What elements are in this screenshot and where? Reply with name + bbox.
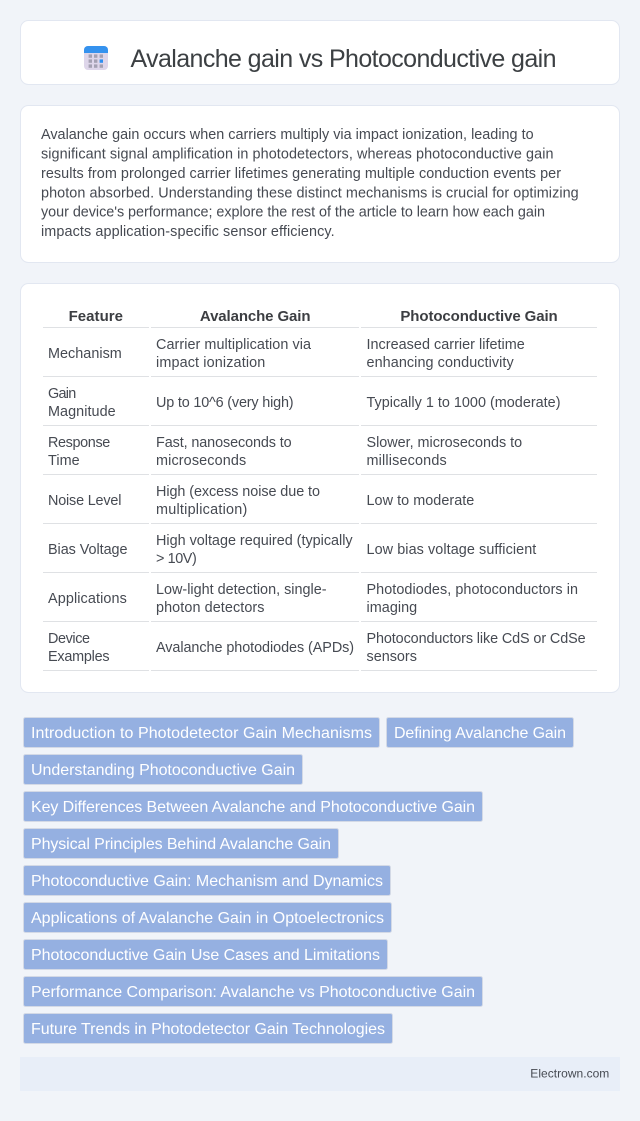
text block: introduction: photon absorbed. Understanding these distinct mechanisms is crucial for optimizing: [41, 185, 579, 201]
table row: device examples: [48, 631, 586, 665]
table row: response time: microseconds: [156, 453, 246, 469]
table row: response time: Fast, nanoseconds to: [156, 435, 292, 451]
tag: understanding photoconductive gain: [24, 754, 302, 784]
table row: device examples: Examples: [48, 649, 110, 665]
tag: performance comparison: Performance Comparison: Avalanche vs Photoconductive Gain: [31, 984, 475, 1001]
table row: applications: Low-light detection, single-: [156, 582, 327, 598]
table row: bias voltage: Low bias voltage sufficient: [366, 542, 536, 558]
tag: physical principles: [24, 828, 338, 858]
footer: Electrown.com: [530, 1066, 609, 1080]
table row: response time: Time: [48, 453, 80, 469]
table row: mechanism: Mechanism: [48, 346, 122, 362]
panel: intro paragraph: [20, 106, 620, 262]
table row: applications: imaging: [366, 600, 417, 616]
table row: applications: Photodiodes, photoconductors in: [366, 582, 578, 598]
table header row: Photoconductive Gain: [400, 308, 558, 325]
tag: use cases: Photoconductive Gain Use Cases and Limitations: [31, 947, 380, 964]
table header row: Avalanche Gain: [200, 308, 310, 325]
footer: [20, 1057, 620, 1091]
tag: mechanism and dynamics: Photoconductive Gain: Mechanism and Dynamics: [31, 873, 383, 890]
table row: response time: [48, 435, 522, 469]
table row: gain magnitude: Gain: [48, 386, 76, 402]
table row: noise level: [48, 484, 474, 518]
tag: defining avalanche gain: [386, 718, 574, 748]
tag: use cases: [24, 940, 388, 970]
table row: mechanism: enhancing conductivity: [366, 355, 514, 371]
table row: device examples: Avalanche photodiodes (APDs): [156, 640, 354, 656]
table header row: Feature: [69, 308, 123, 325]
tag: key differences: [24, 792, 482, 822]
icon: calendar grid: [84, 46, 108, 70]
tag list: article sections: [24, 718, 574, 1044]
table row: bias voltage: High voltage required (typically: [156, 533, 353, 549]
tag: defining avalanche gain: Defining Avalanche Gain: [394, 725, 566, 742]
panel: comparison table: [20, 284, 620, 692]
table row: mechanism: impact ionization: [156, 355, 265, 371]
tag: mechanism and dynamics: [24, 866, 390, 896]
table row: gain magnitude: [48, 386, 560, 420]
text block: introduction: significant signal amplification in photodetectors, whereas photoconductive gain: [41, 146, 554, 162]
table row: applications: photon detectors: [156, 600, 264, 616]
tag: physical principles: Physical Principles Behind Avalanche Gain: [31, 836, 331, 853]
table row: bias voltage: > 10V): [156, 551, 197, 567]
table row: mechanism: Carrier multiplication via: [156, 337, 311, 353]
table row: bias voltage: Bias Voltage: [48, 542, 128, 558]
table row: response time: Slower, microseconds to: [366, 435, 522, 451]
tag: applications: [24, 902, 392, 932]
text block: introduction: results from prolonged carrier lifetimes generating multiple conduction events per: [41, 166, 561, 182]
table row: gain magnitude: Magnitude: [48, 404, 116, 420]
table row: gain magnitude: Typically 1 to 1000 (moderate): [366, 395, 560, 411]
table row: device examples: sensors: [366, 649, 417, 665]
table header row: [69, 308, 558, 325]
table row: applications: Applications: [48, 591, 127, 607]
tag: key differences: Key Differences Between Avalanche and Photoconductive Gain: [31, 799, 475, 816]
table row: device examples: Device: [48, 631, 90, 647]
table row: applications: [48, 582, 578, 616]
tag: understanding photoconductive gain: Understanding Photoconductive Gain: [31, 762, 295, 779]
title: Avalanche gain vs Photoconductive gain: [130, 45, 556, 73]
table row: response time: Response: [48, 435, 110, 451]
tag: future trends: Future Trends in Photodetector Gain Technologies: [31, 1021, 385, 1038]
table row: gain magnitude: Up to 10^6 (very high): [156, 395, 294, 411]
tag: introduction: Introduction to Photodetector Gain Mechanisms: [31, 725, 372, 742]
table row: mechanism: Increased carrier lifetime: [366, 337, 525, 353]
tag: applications: Applications of Avalanche Gain in Optoelectronics: [31, 910, 384, 927]
table row: response time: milliseconds: [366, 453, 447, 469]
text block: introduction: Avalanche gain occurs when carriers multiply via impact ionization, leading to: [41, 127, 534, 143]
tag: introduction: [24, 718, 380, 748]
table row: noise level: multiplication): [156, 502, 247, 518]
tag: future trends: [24, 1014, 392, 1044]
table row: noise level: Noise Level: [48, 493, 121, 509]
table row: bias voltage: [48, 533, 536, 567]
table row: noise level: Low to moderate: [366, 493, 474, 509]
text block: introduction: your device's performance; explore the rest of the article to learn how each gain: [41, 205, 545, 221]
panel: title header: [20, 20, 620, 84]
text block: introduction: [41, 127, 579, 240]
table row: noise level: High (excess noise due to: [156, 484, 320, 500]
table row: mechanism: [48, 337, 525, 371]
text block: introduction: impacts application-specific sensor efficiency.: [41, 224, 335, 240]
table row: device examples: Photoconductors like CdS or CdSe: [366, 631, 586, 647]
tag: performance comparison: [24, 976, 482, 1006]
